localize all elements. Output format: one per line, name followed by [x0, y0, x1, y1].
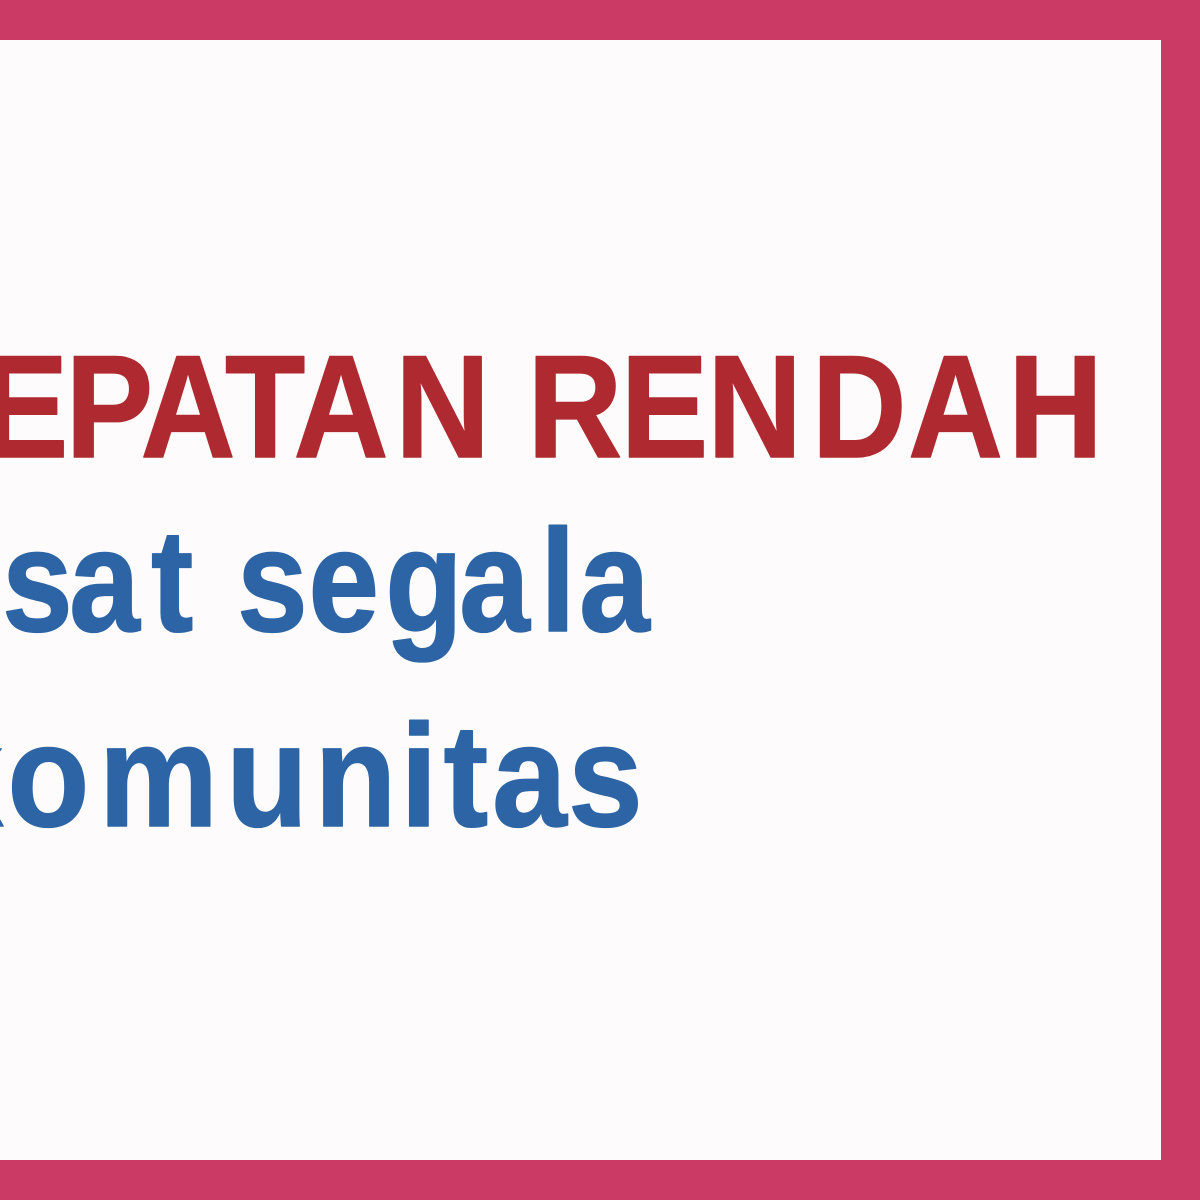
frame: top border [0, 0, 1200, 40]
frame: right border [1161, 0, 1200, 1200]
heading: red cropped title: EPATAN RENDAH [0, 326, 1103, 489]
frame: bottom border [0, 1160, 1200, 1200]
text line: sat segala: sat segala [2, 499, 651, 662]
